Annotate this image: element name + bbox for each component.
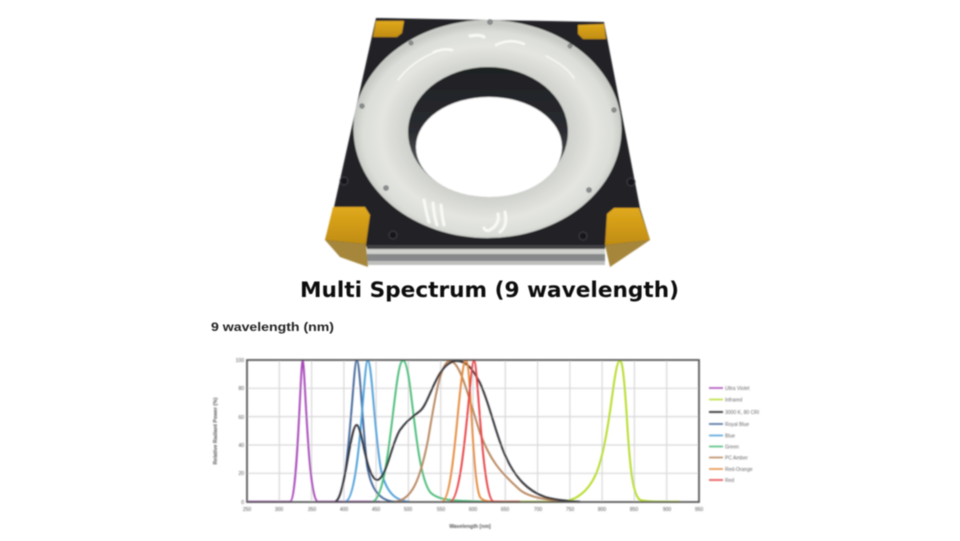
curve: red bbox=[450, 360, 520, 502]
legend: Red-Orange bbox=[725, 467, 753, 473]
central opening bbox=[416, 97, 562, 197]
legend: Ultra Violet bbox=[725, 386, 750, 392]
legend: Royal Blue bbox=[725, 422, 749, 428]
x axis labels: 400 bbox=[340, 507, 348, 513]
curve: 3000 K, 80 CRI bbox=[335, 361, 580, 502]
curve: green bbox=[372, 360, 490, 502]
x axis labels: 750 bbox=[566, 507, 574, 513]
x axis labels: 450 bbox=[372, 507, 380, 513]
legend: Green bbox=[725, 444, 739, 450]
x axis labels: 550 bbox=[437, 507, 445, 513]
title: Multi Spectrum (9 wavelength) bbox=[300, 278, 679, 303]
ring screws bbox=[360, 20, 616, 192]
x axis labels: 950 bbox=[695, 507, 703, 513]
x axis labels: 250 bbox=[243, 507, 251, 513]
plot frame bbox=[247, 360, 699, 502]
y axis labels: 0 bbox=[241, 500, 244, 506]
gold corner top right bbox=[578, 24, 606, 39]
legend: Infrared bbox=[725, 398, 742, 404]
y axis title: Relative Radiant Power (%) bbox=[213, 397, 219, 464]
y axis labels: 100 bbox=[236, 358, 244, 364]
x axis title: Wavelength [nm] bbox=[449, 524, 491, 530]
curve: royal blue bbox=[335, 360, 395, 502]
x axis labels: 350 bbox=[308, 507, 316, 513]
x axis labels: 900 bbox=[663, 507, 671, 513]
legend: 3000 K, 80 CRI bbox=[725, 410, 759, 416]
curve: ultra violet bbox=[248, 360, 380, 502]
gold corner bottom left bbox=[325, 207, 370, 267]
curve: pc amber bbox=[395, 361, 575, 502]
y axis labels: 40 bbox=[238, 443, 244, 449]
black square housing bbox=[325, 18, 650, 247]
gold corner top left bbox=[373, 21, 404, 37]
x axis labels bbox=[243, 507, 703, 513]
x axis labels: 850 bbox=[630, 507, 638, 513]
gold corner bottom right bbox=[605, 208, 650, 267]
x axis labels: 600 bbox=[469, 507, 477, 513]
x axis labels: 500 bbox=[404, 507, 412, 513]
y axis labels: 80 bbox=[238, 386, 244, 392]
x axis labels: 650 bbox=[501, 507, 509, 513]
x axis labels: 700 bbox=[534, 507, 542, 513]
dark inner wall bbox=[408, 67, 568, 197]
curve: red orange bbox=[442, 360, 500, 502]
y axis labels: 60 bbox=[238, 415, 244, 421]
housing screws bbox=[340, 177, 635, 240]
legend: Blue bbox=[725, 434, 735, 440]
grid lines bbox=[247, 360, 699, 502]
product photo: multi-spectrum ring light bbox=[325, 18, 650, 267]
legend: Red bbox=[725, 478, 734, 484]
curve: blue bbox=[345, 360, 410, 502]
white diffuser ring bbox=[354, 20, 622, 238]
x axis labels: 800 bbox=[598, 507, 606, 513]
y axis labels bbox=[236, 358, 244, 506]
x axis labels: 300 bbox=[275, 507, 283, 513]
aluminium front edge bbox=[367, 245, 605, 265]
legend bbox=[709, 386, 759, 484]
curve: infrared bbox=[500, 360, 680, 502]
chart heading: 9 wavelength (nm) bbox=[211, 320, 334, 334]
ring highlights bbox=[398, 35, 574, 232]
y axis labels: 20 bbox=[238, 471, 244, 477]
legend: PC Amber bbox=[725, 456, 748, 462]
spectrum line chart bbox=[213, 358, 759, 530]
